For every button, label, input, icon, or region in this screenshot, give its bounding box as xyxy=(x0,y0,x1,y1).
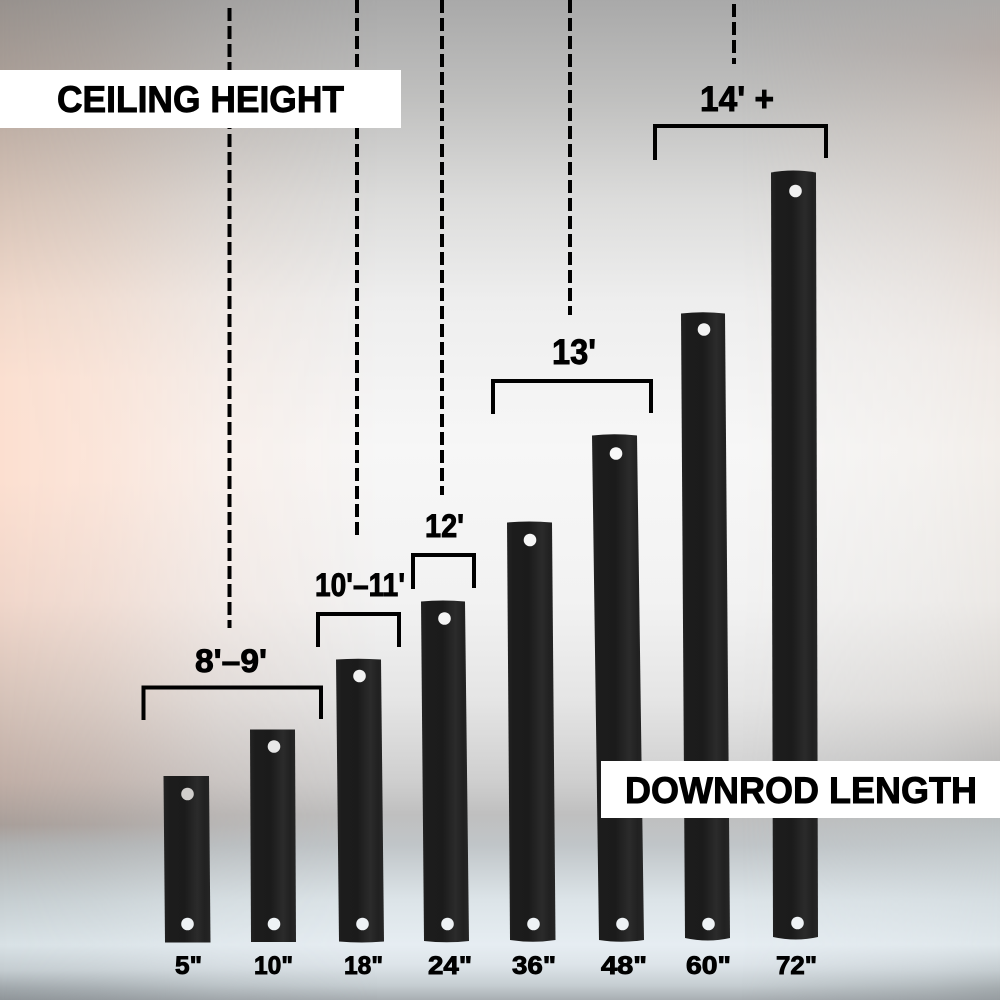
bracket: 10'-11': 10'–11' xyxy=(315,567,405,603)
dashed line: 10'-11' xyxy=(355,0,359,540)
bracket: 14' +: 14' + xyxy=(700,80,774,119)
downrod: 10 inch: 10" xyxy=(254,952,293,980)
bracket: 13': 13' xyxy=(552,333,596,372)
downrod: 18 inch: 18" xyxy=(344,952,383,980)
heading: ceiling height xyxy=(0,70,401,128)
downrod: 18 inch xyxy=(336,659,384,980)
downrod: 60 inch: 60" xyxy=(686,952,731,980)
downrod: 48 inch: 48" xyxy=(601,952,647,980)
dashed line: 12' xyxy=(440,0,444,495)
bracket: 8'-9' xyxy=(144,643,321,720)
downrod: 72 inch xyxy=(771,170,818,980)
dashed line: 8'-9' xyxy=(228,8,232,628)
dashed line: 14' + xyxy=(732,4,736,64)
downrod: 24 inch xyxy=(421,600,472,980)
heading: ceiling height: CEILING HEIGHT xyxy=(57,79,344,120)
downrod: 5 inch xyxy=(164,776,210,980)
downrod: 5 inch: 5" xyxy=(175,952,202,980)
bracket: 12': 12' xyxy=(425,508,464,544)
heading: downrod length xyxy=(601,761,1000,818)
bracket: 10'-11' xyxy=(315,567,405,647)
bracket: 13' xyxy=(493,333,651,414)
bracket: 14' + xyxy=(655,80,826,160)
dashed line: 13' xyxy=(568,0,572,315)
downrod: 10 inch xyxy=(250,730,296,980)
downrod: 72 inch: 72" xyxy=(776,952,817,980)
downrod: 36 inch: 36" xyxy=(512,952,556,980)
heading: downrod length: DOWNROD LENGTH xyxy=(625,770,977,811)
bracket: 8'-9': 8'–9' xyxy=(195,643,267,679)
downrod: 48 inch xyxy=(592,434,647,980)
downrod: 24 inch: 24" xyxy=(428,952,472,980)
downrod: 60 inch xyxy=(681,312,731,980)
downrod: 36 inch xyxy=(507,522,556,980)
bracket: 12' xyxy=(413,508,474,589)
